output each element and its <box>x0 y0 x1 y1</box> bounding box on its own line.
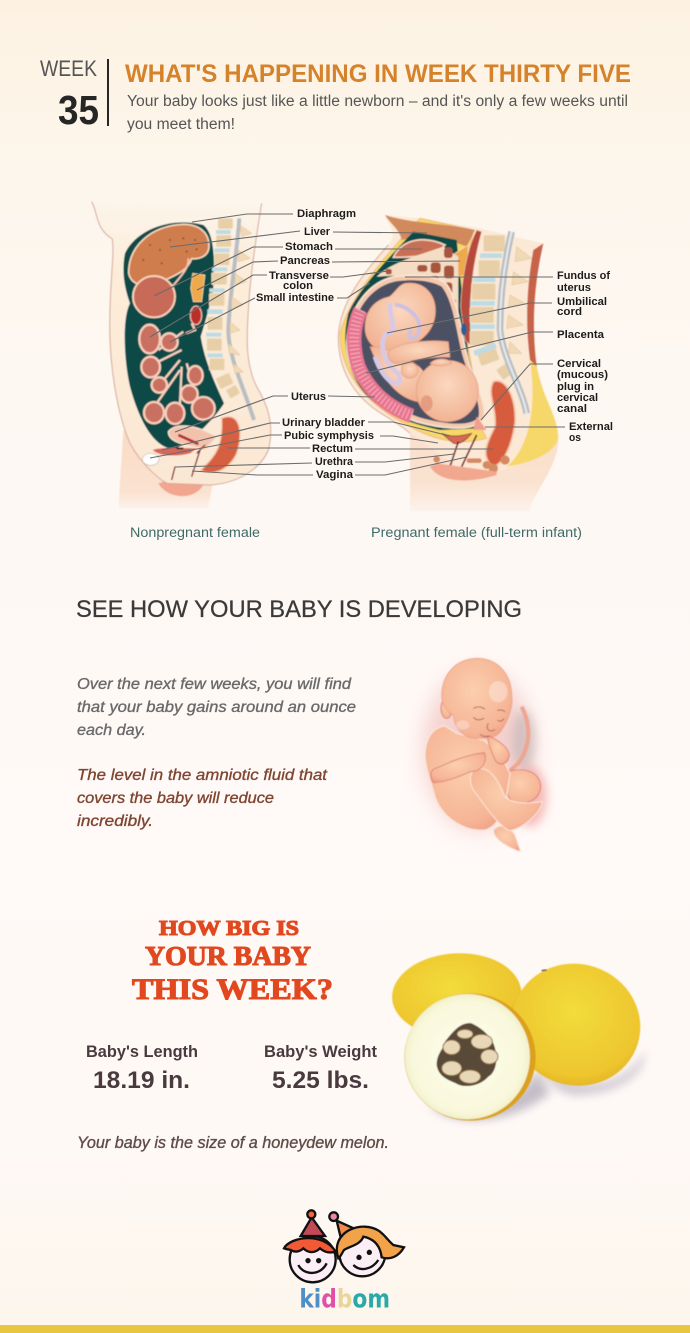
text block: amniotic fluid <box>77 767 328 830</box>
anatomy labels: Transverse <box>269 270 329 282</box>
anatomy labels: Urethra <box>315 456 354 468</box>
anatomy labels: Diaphragm <box>297 208 356 220</box>
stat: baby's length <box>86 1043 198 1094</box>
size comparison text: Your baby is the size of a honeydew melon. <box>77 1134 389 1152</box>
anatomy labels: Rectum <box>312 443 353 455</box>
text block: weight gain: Over the next few weeks, you will find <box>77 676 352 693</box>
anatomy labels: cervical <box>557 392 598 404</box>
stat: baby's weight: Baby's Weight <box>264 1043 377 1061</box>
heading: how big is your baby: THIS WEEK? <box>132 973 333 1006</box>
heading: how big is your baby: YOUR BABY <box>145 941 311 971</box>
anatomy labels: Vagina <box>316 469 354 481</box>
logo icon: girl <box>329 1212 404 1276</box>
header: title and intro: Your baby looks just like a little newborn – and it's only a few weeks until <box>127 93 628 110</box>
logo: Kidbom <box>284 1210 404 1314</box>
caption: pregnant: Pregnant female (full-term infant) <box>371 525 582 540</box>
illustration: fetus at 35 weeks <box>423 658 547 852</box>
anatomy labels: plug in <box>557 381 594 393</box>
illustration: nonpregnant female anatomy <box>92 202 271 508</box>
anatomy labels: colon <box>283 280 313 292</box>
logo icon: boy <box>284 1210 336 1282</box>
text block: amniotic fluid: covers the baby will reduce <box>77 790 274 807</box>
stat: baby's length: Baby's Length <box>86 1043 198 1061</box>
anatomy labels: cord <box>557 306 582 318</box>
anatomy labels: Small intestine <box>256 292 334 304</box>
stat: baby's length: 18.19 in. <box>93 1067 190 1094</box>
anatomy labels: Stomach <box>285 241 333 253</box>
anatomy labels: Fundus of <box>557 270 610 282</box>
anatomy labels: Umbilical <box>557 296 607 308</box>
anatomy labels: (mucous) <box>557 369 608 381</box>
header: title and intro <box>125 60 631 133</box>
stat: baby's weight: 5.25 lbs. <box>272 1067 369 1094</box>
logo wordmark: kidbom <box>299 1284 390 1314</box>
anatomy labels: Cervical <box>557 358 601 370</box>
anatomy labels: canal <box>557 403 587 415</box>
illustration: pregnant female anatomy <box>338 215 558 512</box>
header: week number: WEEK <box>40 56 97 81</box>
header: week number <box>40 56 109 133</box>
header: week number: 35 <box>58 87 99 133</box>
header: title and intro: WHAT'S HAPPENING IN WEEK THIRTY FIVE <box>125 60 631 88</box>
text block: amniotic fluid: The level in the amniotic fluid that <box>77 767 328 784</box>
caption: nonpregnant: Nonpregnant female <box>130 525 260 540</box>
anatomy labels <box>256 208 613 481</box>
illustration: honeydew melons <box>390 947 656 1121</box>
anatomy labels: Uterus <box>291 391 326 403</box>
anatomy labels: uterus <box>557 282 591 294</box>
text block: weight gain: each day. <box>77 722 146 739</box>
text block: weight gain <box>77 676 356 739</box>
text block: weight gain: that your baby gains around an ounce <box>77 699 356 716</box>
footer bar <box>0 1325 690 1333</box>
anatomy labels: Urinary bladder <box>282 417 366 429</box>
section heading: development: SEE HOW YOUR BABY IS DEVELOPING <box>76 596 522 623</box>
anatomy labels: Placenta <box>557 329 605 341</box>
text block: amniotic fluid: incredibly. <box>77 813 153 830</box>
anatomy labels: Liver <box>304 226 331 238</box>
anatomy labels: os <box>569 432 581 444</box>
anatomy labels: Pancreas <box>280 255 330 267</box>
anatomy labels: External <box>569 421 613 433</box>
heading: how big is your baby: HOW BIG IS <box>159 916 299 940</box>
header: title and intro: you meet them! <box>127 116 235 133</box>
anatomy labels: Pubic symphysis <box>284 430 374 442</box>
leader lines for anatomy labels <box>150 214 565 475</box>
stat: baby's weight <box>264 1043 377 1094</box>
heading: how big is your baby <box>132 916 333 1006</box>
